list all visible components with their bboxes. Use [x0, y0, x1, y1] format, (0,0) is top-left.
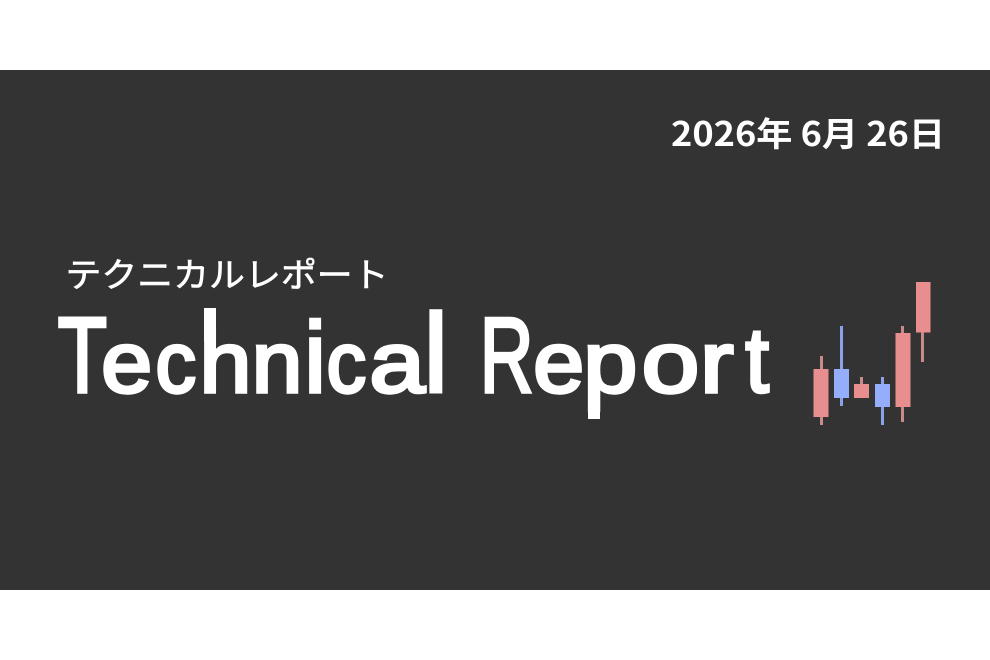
title: t [745, 309, 769, 412]
title: i [304, 301, 326, 413]
candle 5 [896, 326, 910, 422]
title: l [424, 293, 448, 416]
title: a [369, 314, 425, 410]
subtitle: katakana: テクニカルレポート [66, 248, 388, 297]
title: R [480, 296, 534, 415]
candle 6 [916, 282, 930, 362]
title: T [58, 296, 107, 416]
title: p [583, 315, 637, 411]
icon: candlestick chart [814, 282, 930, 425]
candle 3 [854, 377, 869, 398]
candle 4 [875, 377, 890, 425]
candle 1 [814, 356, 828, 425]
title: n [252, 314, 302, 410]
title: e [533, 314, 584, 410]
title: o [642, 315, 699, 411]
title: r [700, 314, 734, 410]
candle 2 [834, 326, 849, 406]
title: e [101, 314, 152, 410]
title: h [200, 315, 251, 411]
panel: dark banner background [0, 70, 990, 590]
title: c [156, 314, 196, 411]
title [58, 293, 769, 417]
title: c [327, 315, 366, 411]
date: 2026年 6月 26日 [671, 107, 945, 156]
